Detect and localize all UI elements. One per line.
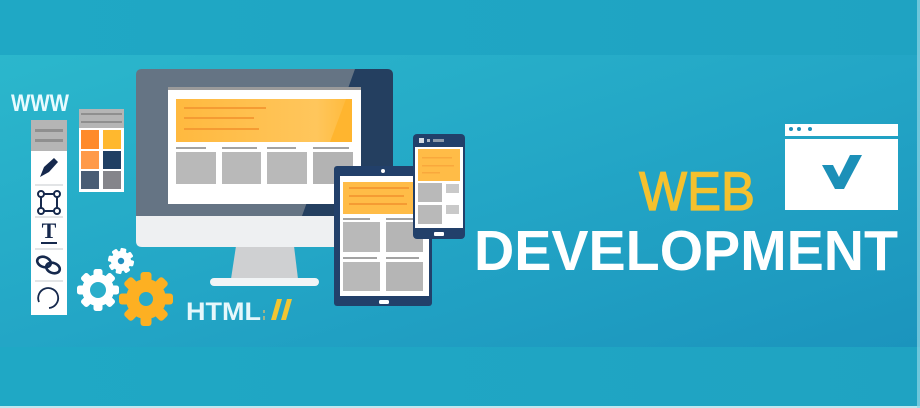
thumbnails: [176, 147, 353, 184]
title: DEVELOPMENT: DEVELOPMENT: [474, 219, 898, 283]
icon: vector shape: [38, 191, 60, 214]
separator dots: [263, 310, 265, 313]
tool palette sidebar: [31, 120, 67, 315]
monitor body: [136, 69, 393, 216]
title: WEB: WEB: [639, 160, 755, 222]
gear: orange: [119, 272, 173, 326]
monitor stand: [231, 246, 298, 279]
icon: chain link: [36, 255, 61, 275]
gears: [77, 246, 173, 326]
gear: large white: [77, 269, 119, 311]
browser window icon: [785, 124, 898, 210]
www label: WWW: [11, 90, 69, 117]
icon: check mark: [822, 155, 862, 189]
monitor screen: [168, 88, 361, 204]
smartphone: [413, 134, 465, 239]
tablet: [334, 166, 432, 306]
icon: text tool: T: [42, 218, 57, 243]
hero block: [176, 99, 352, 142]
desktop monitor: [136, 69, 393, 286]
HTML label: HTML: [186, 298, 261, 326]
slashes: [271, 299, 292, 320]
HTML label: [186, 298, 292, 326]
icon: pencil: [40, 158, 58, 177]
icon: rotate arrow: [38, 288, 58, 308]
colour swatch panel: [79, 109, 124, 192]
gear: small white: [106, 246, 136, 276]
